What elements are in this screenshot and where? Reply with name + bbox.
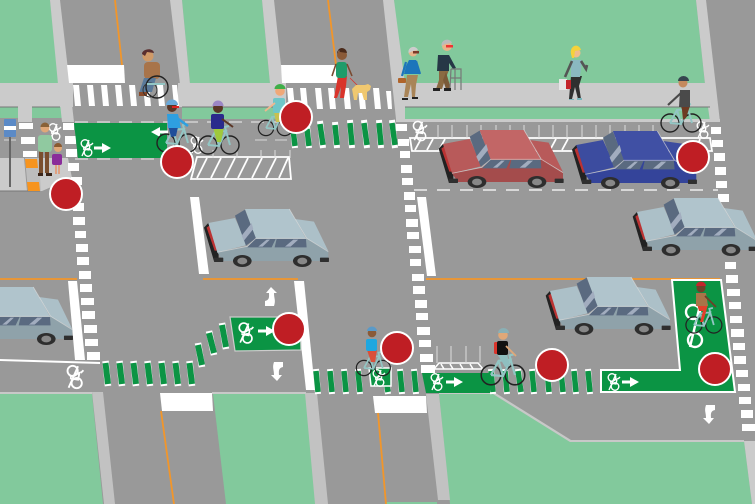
car: blue parked [572, 131, 697, 189]
green bike box: top lane [74, 123, 168, 158]
cyclist: blue helmet by small box [356, 326, 390, 376]
car: red parked [439, 130, 564, 188]
white lane lines [0, 91, 436, 390]
car: silver lower right [546, 277, 671, 335]
parking buffer: upper right [410, 125, 712, 151]
cyclist: green helmet [258, 84, 292, 136]
person: woman walking dog [332, 48, 371, 100]
person: child at bus stop [52, 143, 62, 174]
road bike symbols and turn arrows [49, 121, 715, 424]
marker: 6 small box [381, 332, 413, 364]
car: silver left partial [0, 287, 73, 345]
stop bars [67, 65, 427, 413]
green bike box: small [369, 368, 391, 386]
marker: 7 crossing stripes [536, 349, 568, 381]
car: silver right [633, 198, 755, 256]
cyclist: red backpack [481, 328, 525, 385]
parking buffer: left [191, 150, 291, 179]
green L-shaped bike lane [601, 280, 735, 392]
person: woman with shopping bags [559, 46, 587, 100]
bus stop sign [4, 119, 16, 187]
marker: 5 centre box [273, 313, 305, 345]
person: man with handbag [398, 47, 420, 100]
person: wheelchair user [139, 49, 168, 98]
bike rack [434, 346, 483, 369]
green bike box: centre [230, 317, 301, 351]
cyclist: top right [661, 76, 701, 132]
car: silver centre [204, 209, 329, 267]
green bike box: lower middle [422, 373, 490, 393]
bike crossing stripes: top [293, 120, 395, 148]
marker: 1 bus stop [50, 178, 82, 210]
person: elder with walker [433, 40, 461, 91]
bike crossing stripes: lower left [106, 323, 226, 386]
cyclist: blue helmet [157, 100, 197, 152]
lane dashes [4, 122, 718, 190]
bus stop platform [25, 158, 41, 191]
marker: 8 L-shaped lane [699, 353, 731, 385]
marker: 2 top lane [161, 146, 193, 178]
cyclist: right lane [686, 282, 722, 333]
bike crossing stripes: lower middle and right [316, 369, 590, 394]
cyclist: purple helmet [199, 100, 239, 154]
marker: 3 crossing [280, 101, 312, 133]
ladder markings [19, 123, 755, 431]
person: adult at bus stop [38, 123, 52, 176]
marker: 4 parking [677, 141, 709, 173]
zebra crosswalks [73, 85, 381, 109]
